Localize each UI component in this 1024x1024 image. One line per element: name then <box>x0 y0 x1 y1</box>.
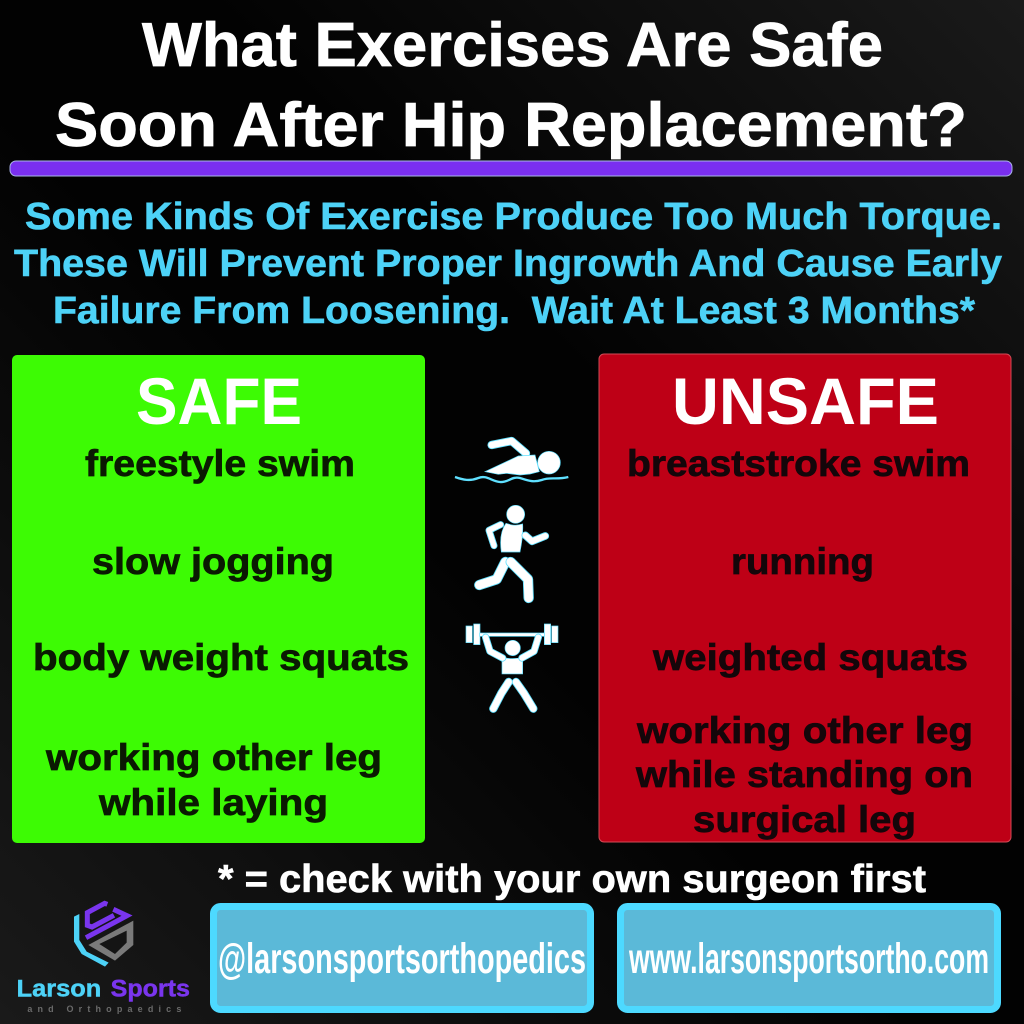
instagram handle button: @larsonsportsorthopedics <box>218 935 586 983</box>
unsafe exercise list: working other leg <box>636 710 973 751</box>
unsafe heading: UNSAFE <box>672 364 939 438</box>
title: What Exercises Are Safe <box>142 11 883 80</box>
instagram handle button <box>214 906 590 1010</box>
unsafe exercise list: weighted squats <box>652 637 968 678</box>
unsafe exercise list: while standing on <box>635 754 973 795</box>
icon: runner <box>479 505 545 598</box>
subtitle text: These Will Prevent Proper Ingrowth And Cause Early <box>14 243 1002 285</box>
website button <box>620 906 998 1010</box>
unsafe exercise list: running <box>731 541 874 582</box>
safe exercise list: while laying <box>98 782 328 823</box>
logo: Sports <box>111 976 190 1003</box>
footnote: * = check with your own surgeon first <box>218 858 926 901</box>
safe exercise list: working other leg <box>45 737 382 778</box>
panel: unsafe <box>599 354 1011 842</box>
title: Soon After Hip Replacement? <box>55 91 967 160</box>
safe exercise list: slow jogging <box>92 541 334 582</box>
title <box>55 11 967 160</box>
logo <box>17 903 190 1014</box>
safe exercise list: freestyle swim <box>85 443 355 484</box>
logo tagline: and Orthopaedics <box>27 1004 181 1014</box>
unsafe exercise list <box>627 443 973 840</box>
unsafe exercise list: breaststroke swim <box>627 443 970 484</box>
subtitle text: Failure From Loosening. Wait At Least 3 Months* <box>53 290 975 332</box>
safe exercise list: body weight squats <box>33 637 409 678</box>
safe exercise list <box>33 443 409 823</box>
logo mark: shield <box>74 903 133 967</box>
panel: safe <box>12 355 425 843</box>
icon: weightlifter <box>466 624 558 709</box>
icon: swimmer <box>455 441 568 482</box>
logo wordmark: Larson <box>17 976 101 1003</box>
unsafe exercise list: surgical leg <box>693 799 916 840</box>
purple divider bar <box>10 161 1012 176</box>
safe heading: SAFE <box>136 364 302 438</box>
subtitle text <box>14 196 1002 332</box>
subtitle text: Some Kinds Of Exercise Produce Too Much Torque. <box>25 196 1002 238</box>
